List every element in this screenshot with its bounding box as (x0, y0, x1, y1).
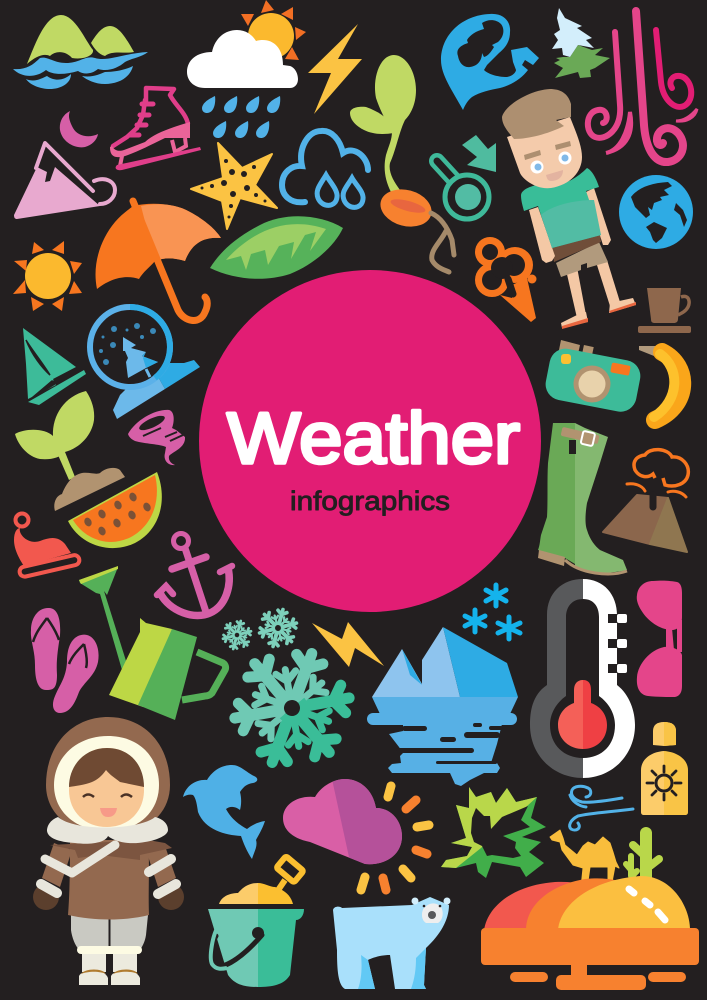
icon: wave (441, 14, 539, 110)
central pink circle (199, 270, 541, 612)
icon: sunglasses (637, 581, 682, 697)
icon: sun behind cloud (187, 0, 306, 88)
icon: orange sun (13, 241, 82, 311)
icon: watering can (79, 566, 226, 720)
icon: pink cloud with sun rays (283, 779, 429, 890)
icon: sand bucket (208, 856, 304, 987)
icon: girl in parka (33, 717, 184, 985)
icon: ice cream (475, 237, 536, 322)
icon: leaf (210, 216, 343, 279)
hood (46, 717, 170, 835)
icon: small snowflakes (219, 605, 301, 653)
icon: desert dunes (481, 876, 699, 990)
icon: boy character (502, 89, 636, 329)
hair (502, 89, 571, 139)
shorts (556, 242, 608, 277)
icon: rubber boot (538, 423, 627, 574)
legs (71, 915, 148, 950)
icon: ice skate (110, 88, 201, 170)
icon: banana (639, 345, 682, 420)
icon: globe (619, 175, 693, 249)
arms (529, 207, 555, 263)
icon: red hat (14, 514, 80, 578)
icon: snow globe (90, 307, 200, 419)
icon: yellow lightning (312, 622, 384, 667)
icon: watermelon (68, 472, 162, 548)
icon: volcano (603, 450, 688, 552)
face (507, 117, 582, 188)
icon: snow crystals (465, 585, 520, 639)
shirt (521, 168, 601, 248)
icon: snowy tree (552, 8, 610, 78)
icon: sprout in soil (15, 391, 125, 511)
icon: teal thermometer with arrow (437, 135, 496, 219)
icon: sailboat (23, 328, 86, 405)
icon: pink wind swirls (588, 11, 697, 162)
arms (42, 843, 72, 887)
subtitle: infographics (290, 486, 450, 516)
fur collar (47, 817, 168, 844)
icon: mountains and waves (13, 15, 148, 89)
icon: pink tornado (128, 410, 185, 465)
icon: cloud with drops (282, 131, 368, 207)
legs (566, 267, 586, 318)
coat (68, 840, 149, 920)
title: Weather (227, 399, 520, 479)
icon: polar bear (333, 897, 450, 989)
icon: cactus (626, 833, 659, 878)
icon: coffee cup (638, 288, 691, 333)
icon: umbrella (96, 201, 221, 320)
icon: big thermometer (530, 579, 635, 778)
fur trims (45, 845, 115, 873)
icon: sprout with seed (350, 55, 454, 272)
icon: iceberg (367, 627, 518, 786)
icon: anchor (157, 534, 232, 616)
icon: starfish (191, 143, 277, 229)
icon: maple leaf (441, 787, 546, 878)
gloves (33, 884, 59, 910)
icon: lightning bolt (308, 24, 362, 114)
icon: flip flops (31, 608, 99, 713)
icon: big snowflake (218, 634, 366, 782)
icon: camel (550, 830, 619, 888)
icon: pink mountain (14, 143, 115, 219)
icon: crescent moon (60, 111, 98, 147)
eyes (530, 160, 544, 174)
icon: blue wind (570, 786, 633, 830)
icon: camera (543, 340, 643, 414)
shoes (79, 970, 108, 985)
icon: dolphin (183, 765, 265, 859)
icon: rain drops (202, 96, 280, 138)
icon: sunscreen bottle (641, 722, 688, 815)
